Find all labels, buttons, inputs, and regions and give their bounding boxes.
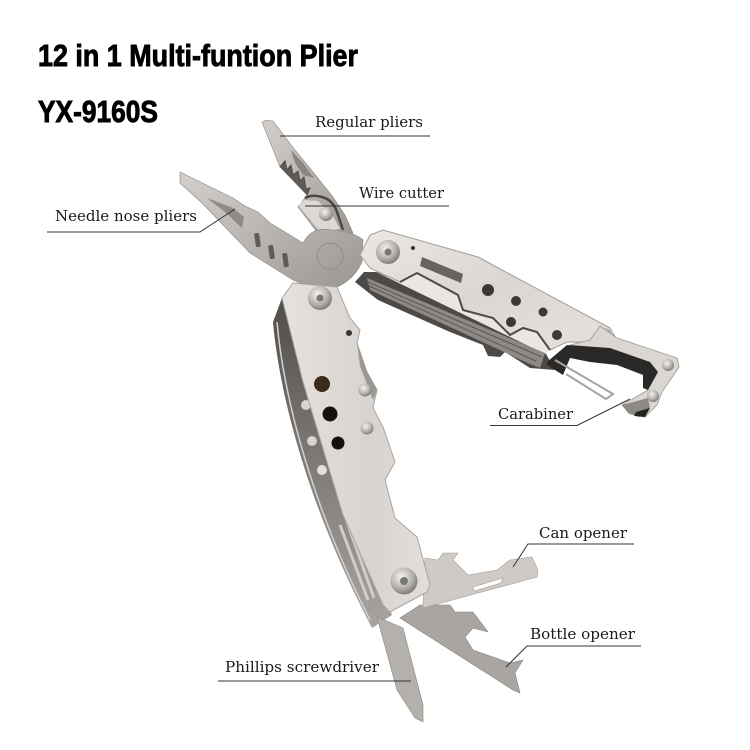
label: carabiner: [490, 399, 630, 426]
label: can opener: Can opener: [539, 524, 628, 542]
regular pliers jaw: [262, 120, 353, 240]
left handle back: [273, 298, 392, 628]
phillips screwdriver: [377, 617, 423, 722]
carabiner: [547, 326, 679, 417]
label: can opener: [513, 524, 634, 567]
label: wire cutter: Wire cutter: [359, 184, 445, 202]
right handle plate: [360, 230, 617, 350]
right handle body: [355, 270, 555, 370]
label: bottle opener: Bottle opener: [530, 625, 636, 643]
can opener: [423, 553, 538, 608]
needle nose jaw with pivot: [180, 172, 363, 290]
multi-tool illustration: [180, 120, 679, 722]
label: bottle opener: [506, 625, 641, 667]
label: carabiner: Carabiner: [498, 405, 574, 423]
label: regular pliers: Regular pliers: [315, 113, 423, 131]
label: needle nose pliers: [47, 207, 235, 232]
model number: YX-9160S: [38, 94, 158, 129]
label: phillips screwdriver: Phillips screwdriver: [225, 658, 380, 676]
title: 12 in 1 Multi-funtion Plier: [38, 38, 358, 73]
label: needle nose pliers: Needle nose pliers: [55, 207, 197, 225]
left handle plate: [282, 283, 430, 612]
bottle opener: [400, 605, 523, 693]
